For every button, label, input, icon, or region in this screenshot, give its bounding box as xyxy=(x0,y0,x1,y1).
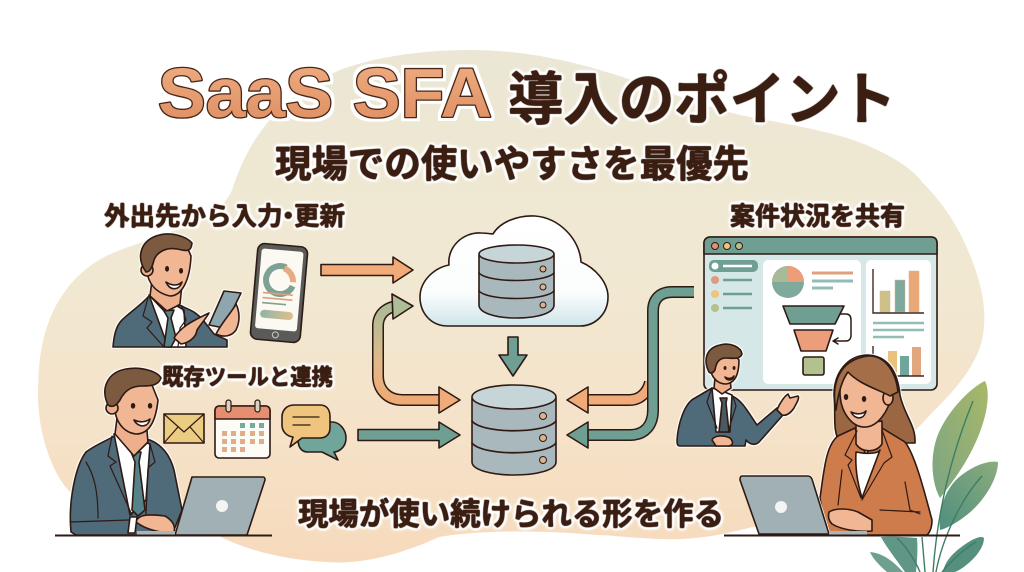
yellow bubble xyxy=(282,405,330,447)
sidebar lines xyxy=(723,280,752,308)
teal shaft fill xyxy=(588,292,694,435)
face xyxy=(710,352,739,384)
mouth xyxy=(134,419,150,426)
pointing hand xyxy=(174,313,209,344)
laptop logo xyxy=(775,501,787,513)
eyes xyxy=(724,366,736,370)
title xyxy=(158,54,896,132)
cylinder top xyxy=(472,385,556,409)
orange cells xyxy=(222,431,264,452)
tie xyxy=(131,452,145,516)
title japanese part: 導入のポイント xyxy=(508,68,896,132)
calendar header xyxy=(215,406,270,419)
jacket sleeve details xyxy=(838,470,920,514)
main panel xyxy=(763,260,861,384)
hair front xyxy=(835,356,898,410)
pie orange slice xyxy=(788,266,804,282)
bars xyxy=(880,271,919,312)
funnel middle xyxy=(794,330,833,351)
head to database xyxy=(439,387,460,413)
lower bar chart xyxy=(873,346,924,376)
axes xyxy=(873,269,924,313)
pie base xyxy=(772,266,804,298)
cylinder body xyxy=(472,398,556,475)
arrow: two-way database and cloud xyxy=(378,294,460,413)
teal line xyxy=(262,303,286,305)
long hair back xyxy=(834,355,915,443)
left desk line xyxy=(55,534,272,536)
face xyxy=(840,372,892,427)
donut chart xyxy=(265,265,294,295)
ear xyxy=(883,391,893,405)
window buttons xyxy=(712,242,742,250)
typing hand xyxy=(136,515,175,533)
neck xyxy=(150,280,182,312)
icon: cloud database xyxy=(420,216,608,326)
icon: calendar xyxy=(215,400,270,458)
pie chart xyxy=(772,266,804,298)
lower bars xyxy=(888,347,921,376)
eyes xyxy=(131,403,152,409)
funnel xyxy=(783,306,851,375)
typing hand xyxy=(828,509,872,531)
curved shaft outline xyxy=(378,306,440,400)
person: woman xyxy=(820,355,932,535)
envelope body xyxy=(164,414,204,443)
tier lines xyxy=(479,273,554,298)
leaf lowest xyxy=(870,552,903,572)
cylinder body xyxy=(479,255,554,318)
window frame xyxy=(704,237,937,390)
teal shaft outline xyxy=(588,292,694,435)
laptop outline xyxy=(740,476,829,534)
database in cloud xyxy=(479,245,554,318)
arrow: dashboard to database orange branch xyxy=(567,382,650,413)
lapels xyxy=(108,436,155,515)
active item dot xyxy=(712,262,718,270)
icon: envelope xyxy=(164,414,204,443)
lapels xyxy=(707,390,736,432)
donut orange xyxy=(283,268,294,282)
legend lines xyxy=(812,273,853,288)
branch shaft outline xyxy=(588,382,650,400)
tier lines xyxy=(472,421,556,453)
blouse xyxy=(856,450,880,498)
person: man with smartphone xyxy=(113,234,241,347)
leaf low left xyxy=(881,537,917,572)
tie xyxy=(719,398,729,432)
person: man at laptop xyxy=(70,368,182,535)
shirt cuff xyxy=(128,517,137,533)
laptop screen xyxy=(742,476,829,534)
button xyxy=(260,309,293,320)
home button xyxy=(272,332,279,338)
shirt xyxy=(114,434,150,515)
eyes xyxy=(165,266,183,274)
label: tool integration: 既存ツールと連携 xyxy=(162,365,333,390)
face xyxy=(115,385,158,434)
icon: main database xyxy=(472,385,556,475)
mouth xyxy=(851,411,866,418)
ear xyxy=(141,264,153,276)
leaf middle xyxy=(940,462,998,530)
active item line xyxy=(723,265,752,267)
bubble text lines xyxy=(293,417,319,425)
neck xyxy=(856,421,882,451)
text lines xyxy=(263,293,293,300)
lapels xyxy=(143,298,186,347)
funnel return arrow xyxy=(833,314,851,344)
shirt xyxy=(149,295,186,347)
arrow: phone to cloud xyxy=(321,257,413,283)
leaf low right xyxy=(943,537,984,572)
label: mobile input: 外出先から入力・更新 xyxy=(104,203,345,231)
icon: left laptop xyxy=(137,477,265,535)
body and pointing arm xyxy=(677,388,783,446)
teal cells xyxy=(240,423,264,428)
screen xyxy=(255,248,304,332)
dashboard window xyxy=(704,237,937,390)
face xyxy=(147,240,191,296)
tie xyxy=(164,310,176,347)
title latin part: SaaS SFA xyxy=(158,54,492,132)
branch shaft fill xyxy=(588,382,650,400)
funnel top xyxy=(783,306,844,324)
teal head xyxy=(567,422,588,448)
raised hand xyxy=(777,394,799,415)
shirt xyxy=(712,388,732,432)
label: deal status sharing: 案件状況を共有 xyxy=(730,203,905,231)
stems and veins xyxy=(897,401,982,572)
status dots xyxy=(540,412,546,464)
sidebar dots xyxy=(711,276,719,312)
arrow: tools to database xyxy=(358,422,460,448)
ear xyxy=(106,402,118,414)
neck xyxy=(714,378,731,394)
hair xyxy=(706,344,742,373)
bottom message: 現場が使い続けられる形を作る xyxy=(298,497,724,532)
jacket xyxy=(820,428,932,535)
leaf upper xyxy=(932,381,988,498)
laptop base xyxy=(829,531,867,535)
person: presenter xyxy=(677,344,799,446)
funnel bottom xyxy=(803,357,824,375)
curved shaft fill xyxy=(378,306,440,400)
cloud xyxy=(420,216,608,326)
donut teal xyxy=(265,265,294,295)
status dots xyxy=(540,266,546,308)
sleeve detail xyxy=(70,462,130,522)
cylinder top xyxy=(479,245,554,263)
mouth xyxy=(725,376,734,380)
handheld phone xyxy=(209,291,241,328)
binder rings xyxy=(226,400,260,412)
arrow: dashboard to database teal xyxy=(567,292,694,448)
upper bar chart xyxy=(873,269,924,313)
decorative plant xyxy=(870,381,998,572)
lower axes xyxy=(873,346,924,376)
eyes xyxy=(844,394,866,402)
title bar xyxy=(704,237,937,254)
envelope flap xyxy=(164,414,204,443)
branch head xyxy=(567,387,588,413)
right panel xyxy=(866,260,931,384)
hand on belly xyxy=(712,436,732,446)
icon: right laptop xyxy=(740,476,867,535)
head up to cloud xyxy=(392,294,413,319)
holding hand xyxy=(216,304,239,336)
teal bubble xyxy=(298,422,346,460)
calendar page xyxy=(215,406,270,458)
suit xyxy=(70,434,182,535)
arrow: cloud down to database xyxy=(499,337,527,376)
phone body xyxy=(250,243,308,343)
lapels xyxy=(845,430,892,500)
laptop base xyxy=(137,531,175,535)
hair xyxy=(105,368,161,406)
active item xyxy=(709,260,758,272)
icon: chat bubbles xyxy=(282,405,346,460)
laptop logo xyxy=(216,500,228,512)
right desk line xyxy=(724,534,960,536)
suit xyxy=(113,296,227,347)
pie sage slice xyxy=(772,266,788,282)
subtitle: 現場での使いやすさを最優先 xyxy=(275,143,749,185)
hair xyxy=(141,234,192,272)
neck xyxy=(115,418,148,456)
icon: smartphone with chart xyxy=(250,243,308,343)
mouth xyxy=(166,282,182,289)
sidebar xyxy=(709,260,758,312)
panel text lines xyxy=(873,323,924,337)
laptop screen xyxy=(175,477,265,535)
